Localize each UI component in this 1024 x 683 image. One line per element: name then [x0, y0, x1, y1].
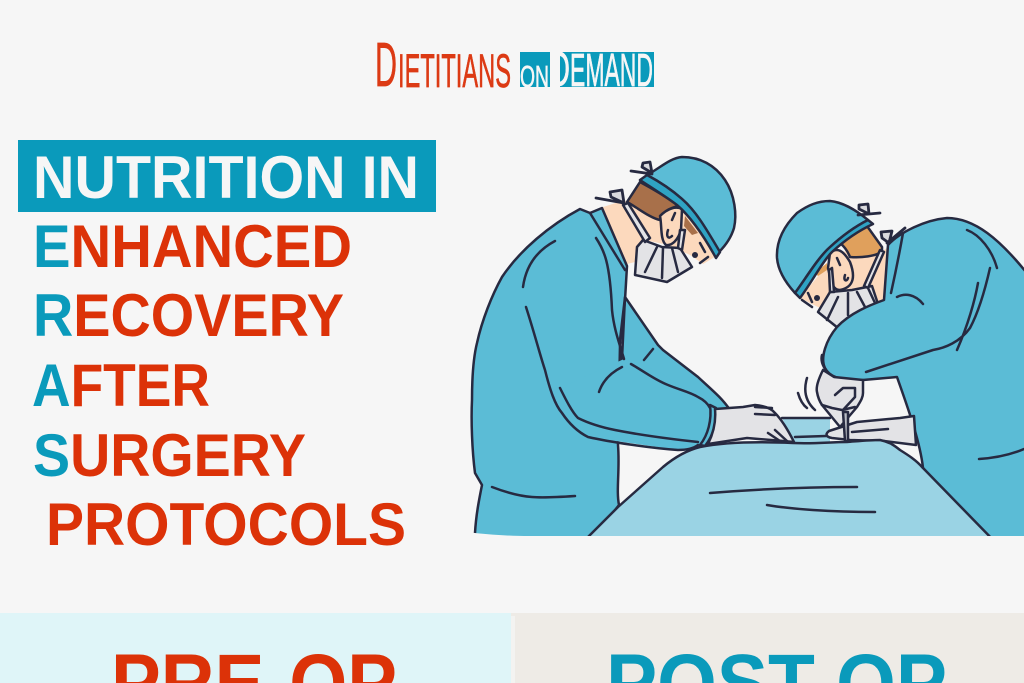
logo: Dietitians on Demand	[375, 31, 654, 100]
far arm	[620, 297, 730, 445]
cap	[777, 201, 868, 293]
neck	[868, 247, 888, 304]
left glove	[708, 405, 794, 444]
mask straps	[623, 203, 650, 242]
logo: Dietitians on Demand: D	[549, 41, 570, 97]
cap band	[795, 220, 873, 298]
illustration: two surgeons operating	[465, 157, 1024, 550]
cap	[647, 157, 735, 252]
ear	[828, 250, 853, 290]
torso and sleeve	[823, 218, 1024, 545]
panel: Pre-Op	[0, 613, 511, 683]
torso and near arm	[472, 208, 627, 545]
garment lines	[492, 213, 710, 497]
hair	[627, 182, 679, 220]
hair	[840, 226, 882, 257]
face	[627, 200, 718, 264]
cuff	[700, 405, 716, 446]
right surgeon	[777, 201, 1024, 545]
sleeve	[560, 359, 710, 450]
ties	[858, 204, 905, 243]
surgical drape	[580, 440, 998, 545]
logo: Dietitians on Demand: D	[375, 31, 397, 100]
patient's exposed area	[782, 418, 830, 445]
garment lines	[822, 230, 1024, 459]
title line: Recovery: RECOVERY	[33, 282, 344, 349]
right upper glove with instrument	[817, 370, 863, 441]
title banner: Nutrition in: NUTRITION IN	[33, 144, 419, 211]
title line: After: AFTER	[32, 352, 210, 419]
ear	[660, 208, 682, 245]
title line: Enhanced: ENHANCED	[33, 213, 352, 280]
left surgeon	[472, 157, 735, 545]
logo: Dietitians on Demand: ON	[520, 59, 549, 94]
motion lines	[798, 378, 815, 410]
cap band	[640, 175, 720, 258]
illustration base edge	[465, 532, 1024, 550]
logo: Dietitians on Demand: IETITIANS	[398, 44, 511, 97]
panel: Post-Op	[511, 613, 1024, 683]
right lower glove	[827, 416, 916, 445]
mask straps	[864, 250, 884, 288]
bottom panels	[0, 613, 1024, 683]
cap and mask ties	[596, 162, 652, 203]
title block	[18, 140, 436, 558]
title line: Protocols: PROTOCOLS	[46, 491, 406, 558]
mask	[635, 240, 692, 282]
neck	[600, 200, 650, 264]
mask	[818, 286, 878, 328]
logo: Dietitians on Demand: EMAND	[570, 44, 653, 96]
face	[800, 250, 882, 308]
title line: Surgery: SURGERY	[33, 422, 306, 489]
